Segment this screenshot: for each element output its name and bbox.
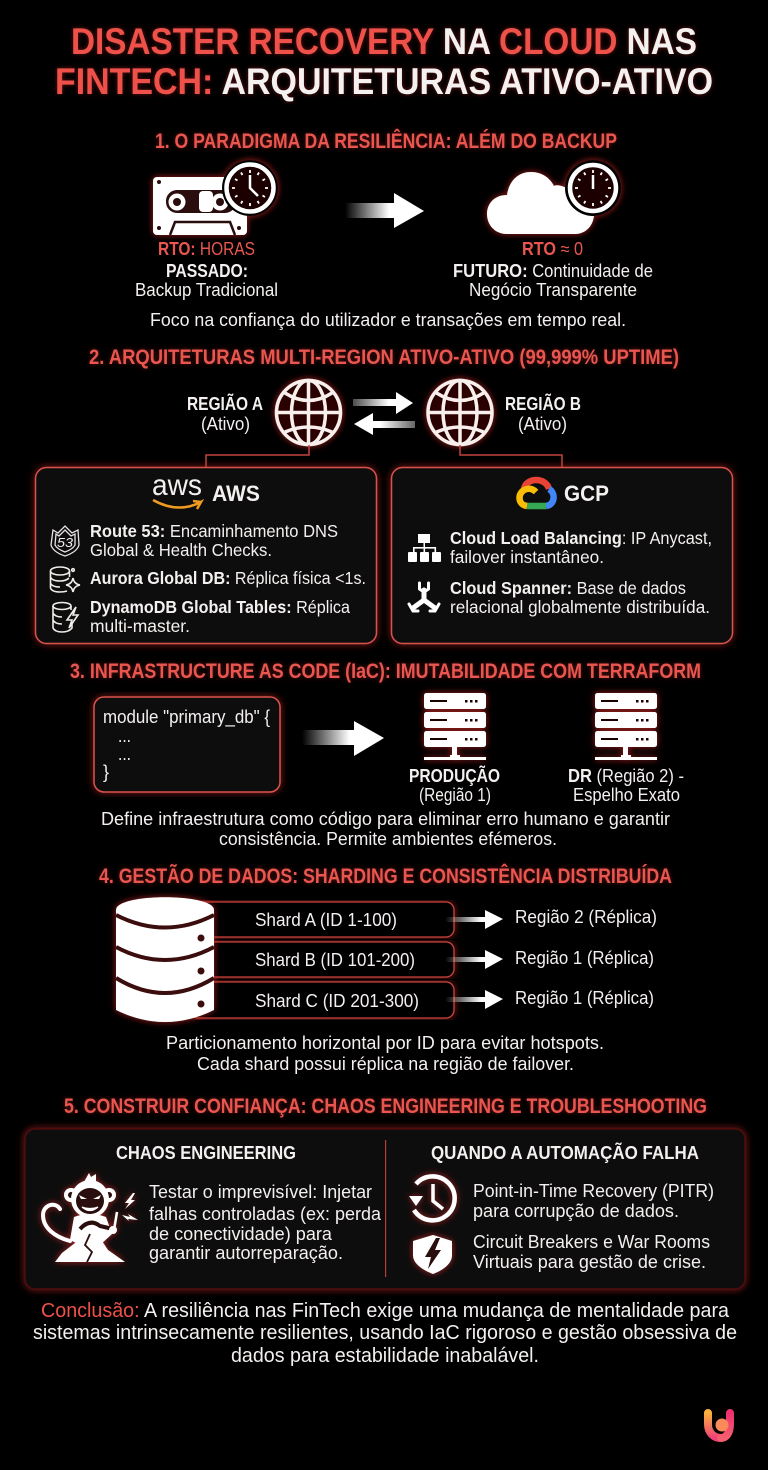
panel: code block: ... [118,726,131,746]
text: replica regions: Região 1 (Réplica) [515,948,654,968]
icon: globe B [428,380,492,444]
icon: chaos monkey [43,1173,138,1262]
text: DynamoDB: DynamoDB Global Tables: Réplica [90,597,350,617]
text: PITR: Point-in-Time Recovery (PITR) [473,1181,714,1201]
label: DR: DR (Região 2) - [568,766,684,786]
icon: wrench trident [409,583,439,611]
icon: cassette with clock [153,160,278,235]
text: PITR: para corrupção de dados. [473,1201,679,1221]
text: Aurora: Aurora Global DB: Réplica física <1s. [90,568,366,588]
text: chaos description: Testar o imprevisível: Injetar [149,1182,372,1202]
text: sharding note [166,1033,604,1074]
text: conclusion: Conclusão: A resiliência nas FinTech exige uma mudança de mentalidade para [41,1300,730,1322]
text: conclusion: sistemas intrinsecamente resilientes, usando IaC rigoroso e gestão obsessiva de [33,1322,737,1344]
text: IaC note: consistência. Permite ambientes efémeros. [219,829,557,849]
text: shard labels: Shard B (ID 101-200) [255,950,415,970]
text: future column: Negócio Transparente [469,280,637,300]
text: past column: PASSADO: [166,261,248,281]
text: replica regions: Região 2 (Réplica) [515,907,657,927]
text: chaos description: de conectividade) para [149,1224,333,1244]
heading: AWS: AWS [212,481,260,506]
text: Cloud Load Balancing [450,528,712,567]
text: shard labels: Shard A (ID 1-100) [255,910,397,930]
shard A box [190,902,454,937]
shard C box [190,982,454,1018]
text: conclusion [33,1300,737,1367]
label: production [409,765,500,805]
arrows: shards to regions [445,910,503,1009]
arrow: B to A [354,413,415,435]
label: DR: Espelho Exato [573,785,680,805]
shard rows [190,902,454,1018]
label: DR [568,766,684,805]
text: replica regions: Região 1 (Réplica) [515,988,654,1008]
panel: GCP [392,468,732,644]
text: Cloud Spanner [450,578,710,617]
text: future column: RTO ≈ 0 [522,239,583,259]
text: IaC note: Define infraestrutura como código para eliminar erro humano e garantir [101,809,670,829]
icon: DR server [595,693,657,760]
text: circuit breakers: Virtuais para gestão de crise. [473,1252,706,1272]
arrow: past to future [345,193,424,228]
icon: AWS logo: aws [152,469,202,502]
panel: code block [94,697,280,792]
title [55,21,713,102]
panel: AWS [36,468,376,644]
icon: lightning shield [413,1235,452,1274]
panel: code block: ... [118,744,131,764]
text: chaos description: garantir autorreparação. [149,1243,343,1263]
shard B box [190,942,454,977]
arrow: A to B [353,392,413,414]
text: focus note: Foco na confiança do utilizador e transações em tempo real. [150,310,626,330]
label: region B: (Ativo) [518,414,567,434]
icon: DynamoDB [53,602,78,632]
icon: production server [424,693,486,760]
text: DynamoDB: multi-master. [90,616,190,636]
icon: Route 53 shield [51,526,79,556]
title: FINTECH: ARQUITETURAS ATIVO-ATIVO [55,61,713,102]
text: sharding note: Cada shard possui réplica na região de failover. [197,1054,574,1074]
connector: globe A to AWS [206,445,309,467]
label: region A [187,393,263,434]
text: sharding note: Particionamento horizontal por ID para evitar hotspots. [166,1033,604,1053]
text: future column: FUTURO: Continuidade de [453,261,653,281]
heading: section 4: 4. GESTÃO DE DADOS: SHARDING E CONSISTÊNCIA DISTRIBUÍDA [99,864,672,888]
text: Cloud Spanner: relacional globalmente distribuída. [450,597,710,617]
icon: Google Cloud logo [520,480,554,506]
text: PITR [473,1181,714,1221]
text: conclusion: dados para estabilidade inabalável. [231,1345,539,1367]
icon: Route 53 shield: 53 [57,535,74,550]
text: Cloud Spanner: Cloud Spanner: Base de dados [450,578,686,598]
arrow: code to servers [302,721,384,756]
icon: globe A [276,380,340,444]
text: DynamoDB [90,597,350,636]
label: production: PRODUÇÃO [409,765,500,786]
label: region A: REGIÃO A [187,393,263,414]
text: future column [453,239,653,300]
text: replica regions [515,907,657,1008]
text: past column [135,239,278,300]
heading: GCP: GCP [564,481,609,506]
connector: globe B to GCP [460,445,562,467]
text: Route 53: Route 53: Encaminhamento DNS [90,521,338,541]
icon: load balancer hierarchy [408,534,441,562]
heading: section 1: 1. O PARADIGMA DA RESILIÊNCIA: ALÉM DO BACKUP [155,129,617,153]
label: production: (Região 1) [419,785,491,805]
divider [385,1140,386,1277]
text: past column: Backup Tradicional [135,280,278,300]
icon: brand logo [708,1413,730,1438]
text: shard labels: Shard C (ID 201-300) [255,991,419,1011]
label: region B [505,393,581,434]
text: past column: RTO: HORAS [158,239,255,259]
text: circuit breakers [473,1232,710,1272]
text: Cloud Load Balancing: failover instantâneo. [450,547,604,567]
text: Route 53 [90,521,338,560]
panel: trust [25,1129,745,1289]
text: Cloud Load Balancing: Cloud Load Balancing: IP Anycast, [450,528,712,548]
panel: code block: } [103,762,109,782]
label: region B: REGIÃO B [505,393,581,414]
panel: code block: module "primary_db" { [103,707,270,728]
icon: Aurora database [50,567,80,592]
icon: database cylinder [116,897,214,1022]
label: region A: (Ativo) [201,414,250,434]
text: circuit breakers: Circuit Breakers e War Rooms [473,1232,710,1252]
text: chaos description: falhas controladas (ex: perda [149,1204,382,1224]
text: IaC note [101,809,670,849]
text: Route 53: Global & Health Checks. [90,540,272,560]
title: DISASTER RECOVERY NA CLOUD NAS [71,21,697,62]
heading: section 2: 2. ARQUITETURAS MULTI-REGION ATIVO-ATIVO (99,999% UPTIME) [89,346,679,369]
heading: chaos engineering: CHAOS ENGINEERING [116,1143,296,1163]
icon: history clock [409,1176,455,1220]
text: chaos description [149,1182,382,1263]
icon: cloud with clock [487,160,621,234]
text: shard labels [255,910,419,1011]
heading: when automation fails: QUANDO A AUTOMAÇÃO FALHA [431,1142,699,1163]
